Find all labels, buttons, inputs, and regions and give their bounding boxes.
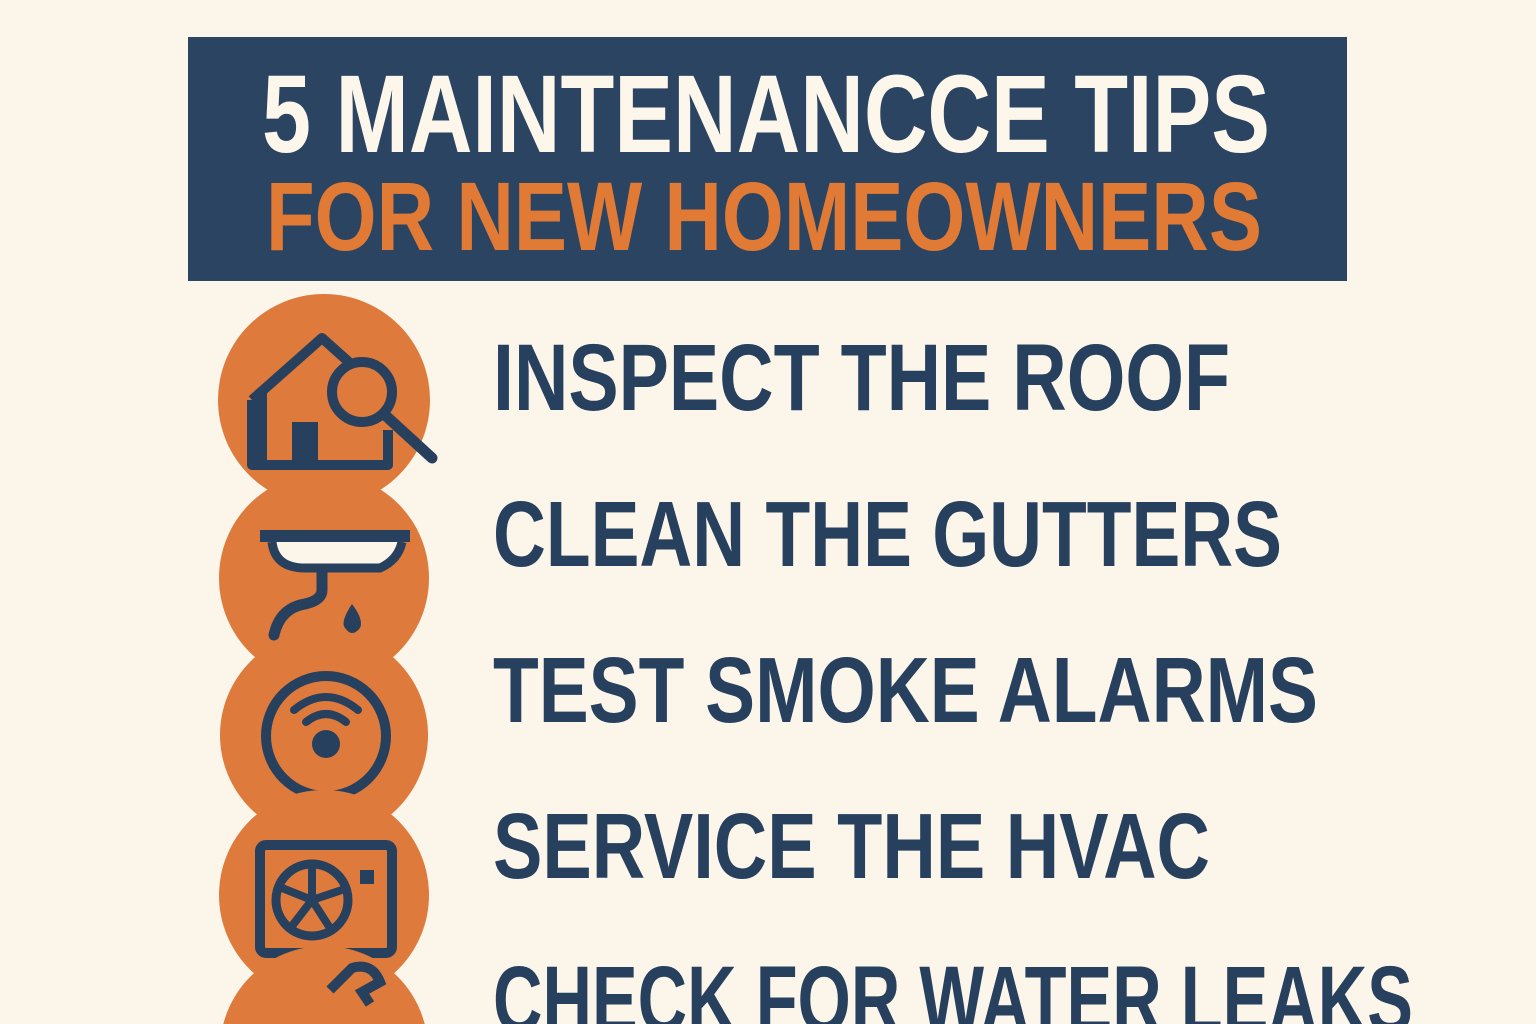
icon: gutter <box>219 473 429 683</box>
icon: smoke alarm <box>220 631 428 839</box>
tip 2: CLEAN THE GUTTERS <box>493 482 1282 586</box>
title line 1: 5 MAINTENANCCE TIPS <box>262 53 1270 176</box>
tip 1: INSPECT THE ROOF <box>493 325 1230 431</box>
icon: HVAC unit <box>219 790 429 1000</box>
title line 2: FOR NEW HOMEOWNERS <box>266 162 1262 271</box>
icon: roof inspection <box>218 294 432 506</box>
tip 3: TEST SMOKE ALARMS <box>493 638 1318 742</box>
title banner <box>188 37 1347 281</box>
tip 4: SERVICE THE HVAC <box>493 794 1210 898</box>
icon: wrench <box>220 946 428 1024</box>
